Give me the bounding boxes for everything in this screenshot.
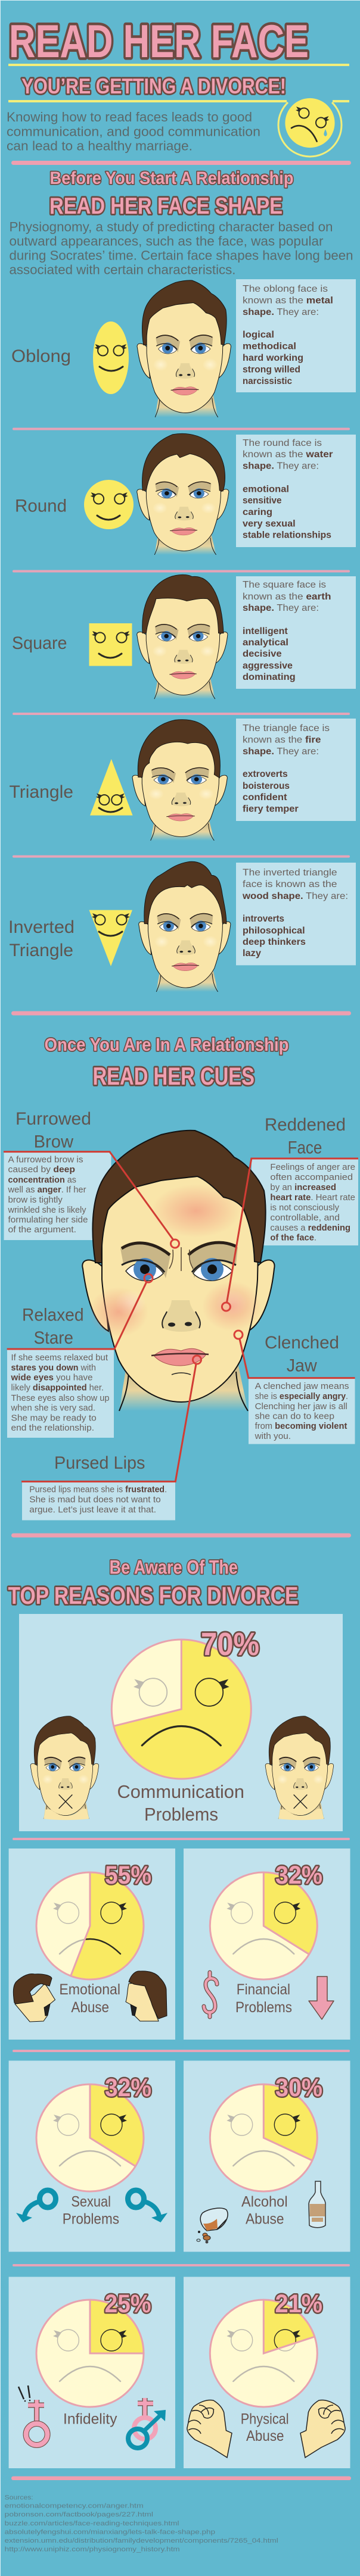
text: oblong traits: logical xyxy=(243,330,274,340)
panel: reddened face text: is not consciously xyxy=(270,1203,340,1213)
pie chart: 55% xyxy=(36,1872,144,1979)
pie chart: 32% xyxy=(36,2084,144,2191)
icon: round smiley xyxy=(84,480,134,529)
text: inverted triangle traits: The inverted triangle xyxy=(243,868,337,878)
label: alcohol abuse: Abuse xyxy=(246,2211,284,2228)
panel: reddened face text: of the face. xyxy=(270,1234,316,1243)
text: triangle traits: shape. They are: xyxy=(243,747,319,757)
label: reddened face: Reddened xyxy=(265,1115,346,1135)
text: oblong traits: The oblong face is xyxy=(243,284,328,294)
label: emotional abuse: Abuse xyxy=(71,1999,109,2016)
text: round traits xyxy=(236,435,356,547)
panel: clenched jaw text: from becoming violent xyxy=(255,1422,347,1431)
callout line: relaxed stare xyxy=(7,1274,153,1349)
pie chart: 30% xyxy=(210,2084,317,2191)
text: round traits: stable relationships xyxy=(243,530,331,541)
panel: relaxed stare text: end the relationship. xyxy=(11,1423,94,1433)
physiognomy text: outward appearances, such as the face, was popular xyxy=(10,233,323,249)
sources: http://www.uniphiz.com/physiognomy_history.htm xyxy=(5,2546,180,2553)
text: inverted triangle traits xyxy=(236,863,356,965)
panel: pursed lips text: Pursed lips means she is frustrated. xyxy=(29,1485,167,1494)
panel: relaxed stare text: She may be ready to xyxy=(11,1413,97,1423)
panel: clenched jaw text: with you. xyxy=(255,1432,291,1441)
text: round traits: sensitive xyxy=(243,496,282,506)
text: triangle traits: extroverts xyxy=(243,769,288,779)
label: emotional abuse: Emotional xyxy=(59,1981,120,1998)
label: clenched jaw xyxy=(265,1333,339,1376)
face: angry woman xyxy=(82,1131,275,1411)
icon: fist right xyxy=(300,2400,345,2458)
text: inverted triangle traits: philosophical xyxy=(243,926,305,936)
panel: clenched jaw text xyxy=(249,1378,355,1444)
intro text: communication, and good communication xyxy=(7,124,260,139)
label: furrowed brow: Brow xyxy=(34,1132,73,1151)
panel: furrowed brow text: formulating her side xyxy=(8,1216,88,1225)
panel: clenched jaw text: Clenching her jaw is all xyxy=(255,1402,347,1412)
heading: read her cues: READ HER CUES xyxy=(93,1062,255,1090)
panel: pursed lips text: argue. Let’s just leave it at that. xyxy=(29,1505,156,1515)
heading: be aware of the: Be Aware Of The xyxy=(110,1557,238,1578)
stat: 32%: 32% xyxy=(105,2074,151,2102)
sources: absolutelyfengshui.com/mianxiang/lets-talk-face-shape.php xyxy=(5,2529,215,2536)
intro text: can lead to a healthy marriage. xyxy=(7,138,193,154)
text: oblong traits: known as the metal xyxy=(243,295,333,306)
text: oblong traits: narcissistic xyxy=(243,376,292,386)
text: square traits: The square face is xyxy=(243,580,326,590)
heading: top reasons for divorce: TOP REASONS FOR DIVORCE xyxy=(8,1582,298,1609)
label: reddened face xyxy=(265,1115,346,1157)
icon: oblong smiley xyxy=(93,321,129,394)
text: oblong traits: shape. They are: xyxy=(243,307,319,317)
panel: reddened face text: Feelings of anger are xyxy=(270,1163,355,1172)
heading: read her face shape: READ HER FACE SHAPE xyxy=(49,193,283,219)
label: square: Square xyxy=(12,633,67,653)
label: physical abuse: Abuse xyxy=(246,2428,284,2444)
label: clenched jaw: Jaw xyxy=(287,1356,317,1376)
text: square traits: known as the earth xyxy=(243,592,331,602)
label: inverted triangle xyxy=(8,917,75,960)
label: financial problems: Problems xyxy=(235,1999,292,2016)
panel: alcohol abuse xyxy=(184,2060,350,2252)
face: round xyxy=(137,433,229,555)
panel: furrowed brow text: concentration as xyxy=(8,1175,76,1185)
panel: square xyxy=(12,574,356,699)
text: square traits: shape. They are: xyxy=(243,603,319,613)
label: emotional abuse xyxy=(59,1981,120,2016)
icon: male symbol left xyxy=(16,2190,56,2222)
panel: furrowed brow text: wrinkled she is likely xyxy=(8,1206,86,1215)
panel: reddened face text: by an increased xyxy=(270,1183,336,1192)
icon: shouting man xyxy=(13,1974,55,2022)
text: oblong traits: hard working xyxy=(243,353,303,363)
pie chart: 32% xyxy=(210,1872,317,1979)
face: triangle xyxy=(132,720,227,841)
text: triangle traits: boisterous xyxy=(243,781,290,791)
text: round traits: The round face is xyxy=(243,438,322,448)
stat: 70%: 70% xyxy=(201,1626,259,1662)
text: triangle traits: The triangle face is xyxy=(243,723,330,733)
panel: furrowed brow text: brow is tightly xyxy=(8,1195,63,1205)
text: inverted triangle traits: introverts xyxy=(243,914,284,924)
panel: furrowed brow text: caused by deep xyxy=(8,1165,75,1175)
text: oblong traits xyxy=(236,279,356,392)
icon: female and male symbols xyxy=(128,2398,166,2448)
face: gagged left xyxy=(30,1716,99,1820)
panel: reddened face text: heart rate. Heart rate xyxy=(270,1193,355,1203)
physiognomy text: Physiognomy, a study of predicting character based on xyxy=(10,219,333,235)
heading: before you start a relationship: Before You Start A Relationship xyxy=(50,168,293,188)
label: inverted triangle: Triangle xyxy=(10,941,73,960)
panel: communication problems xyxy=(19,1614,343,1831)
icon: fist left xyxy=(187,2400,232,2458)
stat: 55%: 55% xyxy=(105,1861,151,1890)
face: inverted triangle xyxy=(139,861,231,992)
physiognomy text xyxy=(10,219,353,277)
panel: relaxed stare text: likely disappointed her. xyxy=(11,1384,104,1393)
pie chart: 70% xyxy=(111,1640,251,1779)
label: furrowed brow: Furrowed xyxy=(15,1109,91,1129)
label: physical abuse: Physical xyxy=(241,2411,289,2428)
panel: reddened face text: often accompanied xyxy=(270,1173,353,1182)
text: square traits: decisive xyxy=(243,649,282,659)
text: triangle traits: known as the fire xyxy=(243,735,321,745)
label: relaxed stare: Relaxed xyxy=(22,1306,84,1325)
label: financial problems xyxy=(235,1981,292,2016)
pie chart: 25% xyxy=(36,2300,144,2407)
sources xyxy=(5,2494,278,2553)
panel: furrowed brow text xyxy=(4,1152,111,1240)
intro text: Knowing how to read faces leads to good xyxy=(7,110,252,124)
text: inverted triangle traits: lazy xyxy=(243,948,261,958)
panel: sexual problems xyxy=(9,2060,175,2252)
panel: reddened face text xyxy=(252,1159,358,1245)
text: square traits: aggressive xyxy=(243,661,293,671)
text: inverted triangle traits: face is known as the xyxy=(243,879,337,889)
icon: dollar sign xyxy=(204,1972,217,2017)
sources: pobronson.com/factbook/pages/227.html xyxy=(5,2511,153,2518)
label: communication problems xyxy=(117,1781,244,1825)
text: round traits: shape. They are: xyxy=(243,461,319,472)
label: communication problems: Problems xyxy=(144,1804,218,1825)
panel: pursed lips text: She is mad but does not want to xyxy=(29,1495,161,1505)
panel: relaxed stare text: when she is very sad. xyxy=(10,1404,95,1413)
label: triangle: Triangle xyxy=(10,782,73,802)
label: alcohol abuse xyxy=(241,2194,288,2228)
panel: relaxed stare text: These eyes also show up xyxy=(11,1394,110,1403)
label: pursed lips: Pursed Lips xyxy=(54,1453,145,1473)
panel: furrowed brow text: of the argument. xyxy=(8,1225,76,1235)
label: sexual problems: Sexual xyxy=(71,2194,111,2210)
panel: oblong xyxy=(11,279,356,417)
text: round traits: known as the water xyxy=(243,449,333,460)
text: round traits: emotional xyxy=(243,485,289,494)
label: round: Round xyxy=(15,497,67,516)
heading: once you are in a relationship: Once You Are In A Relationship xyxy=(44,1034,288,1055)
text: round traits: caring xyxy=(243,507,272,517)
text: triangle traits xyxy=(236,719,356,821)
text: square traits: intelligent xyxy=(243,626,288,636)
sources: buzzle.com/articles/face-reading-techniques.html xyxy=(5,2520,179,2527)
physiognomy text: during Socrates’ time. Certain face shapes have long been xyxy=(10,248,353,263)
callout line: furrowed brow xyxy=(4,1152,179,1248)
panel: relaxed stare text xyxy=(7,1349,114,1438)
text: triangle traits: confident xyxy=(243,792,287,803)
callout line: clenched jaw xyxy=(234,1331,355,1378)
panel: relaxed stare text: wide eyes you have xyxy=(10,1373,93,1383)
icon: triangle smiley xyxy=(90,759,133,816)
panel: infidelity xyxy=(9,2277,175,2468)
icon: down arrow xyxy=(309,1977,334,2019)
label: oblong: Oblong xyxy=(11,346,71,366)
label: sexual problems: Problems xyxy=(63,2211,119,2228)
text: square traits: dominating xyxy=(243,672,296,682)
label: furrowed brow xyxy=(15,1109,91,1151)
sources: extension.umn.edu/distribution/familydevelopment/components/7265_04.html xyxy=(5,2537,278,2544)
label: alcohol abuse: Alcohol xyxy=(241,2194,288,2210)
panel: inverted triangle xyxy=(8,861,356,992)
callout line: reddened face xyxy=(222,1159,358,1311)
label: relaxed stare xyxy=(22,1306,84,1348)
panel: round xyxy=(15,433,356,555)
face: oblong xyxy=(137,280,231,417)
text: oblong traits: methodical xyxy=(243,342,296,351)
label: reddened face: Face xyxy=(288,1138,322,1157)
text: oblong traits: strong willed xyxy=(243,364,300,375)
panel: emotional abuse xyxy=(9,1849,175,2040)
stat: 25%: 25% xyxy=(105,2290,151,2318)
panel: relaxed stare text: If she seems relaxed but xyxy=(11,1353,108,1363)
physiognomy text: associated with certain characteristics. xyxy=(10,262,236,277)
text: round traits: very sexual xyxy=(243,519,296,529)
label: relaxed stare: Stare xyxy=(34,1328,73,1348)
label: clenched jaw: Clenched xyxy=(265,1333,339,1353)
face: square xyxy=(137,574,228,699)
stat: 32%: 32% xyxy=(275,1861,322,1890)
icon: crying face xyxy=(278,98,342,157)
panel: reddened face text: controllable, and xyxy=(270,1213,340,1223)
icon: inverted triangle smiley xyxy=(89,910,132,966)
panel: clenched jaw text: she is especially angry. xyxy=(255,1392,348,1401)
label: physical abuse xyxy=(241,2411,289,2444)
text: inverted triangle traits: wood shape. They are: xyxy=(242,891,348,901)
icon: square smiley xyxy=(89,623,132,666)
panel: reddened face text: causes a reddening xyxy=(270,1223,350,1233)
panel: furrowed brow text: A furrowed brow is xyxy=(8,1155,83,1164)
sources: Sources: xyxy=(5,2494,33,2502)
icon: bottle xyxy=(309,2181,325,2228)
panel: clenched jaw text: A clenched jaw means xyxy=(255,1382,349,1391)
panel: clenched jaw text: she can do to keep xyxy=(255,1412,334,1422)
panel: financial problems xyxy=(184,1849,350,2040)
stat: 30%: 30% xyxy=(275,2074,322,2102)
sources: emotionalcompetency.com/anger.htm xyxy=(5,2503,144,2510)
intro text xyxy=(7,110,260,154)
label: inverted triangle: Inverted xyxy=(8,917,75,937)
text: inverted triangle traits: deep thinkers xyxy=(243,937,306,947)
callout line: pursed lips xyxy=(21,1356,201,1482)
label: infidelity: Infidelity xyxy=(63,2411,117,2428)
panel: relaxed stare text: stares you down with xyxy=(11,1363,96,1373)
pie chart: 21% xyxy=(210,2300,317,2407)
text: square traits: analytical xyxy=(243,638,288,648)
panel: furrowed brow text: well as anger. If her xyxy=(7,1185,86,1195)
panel: physical abuse xyxy=(184,2277,350,2468)
label: financial problems: Financial xyxy=(237,1981,290,1998)
text: square traits xyxy=(236,576,356,689)
face: gagged right xyxy=(265,1716,334,1820)
panel: triangle xyxy=(10,719,356,841)
icon: male symbol right xyxy=(128,2190,167,2222)
panel: pursed lips text xyxy=(22,1482,175,1520)
subtitle: YOU’RE GETTING A DIVORCE! xyxy=(21,74,286,98)
icon: female symbol with exclamation xyxy=(18,2385,48,2445)
label: communication problems: Communication xyxy=(117,1781,244,1802)
icon: shouting woman xyxy=(126,1971,167,2021)
icon: spilled glass xyxy=(197,2208,228,2243)
text: triangle traits: fiery temper xyxy=(243,804,299,814)
label: sexual problems xyxy=(63,2194,119,2228)
stat: 21%: 21% xyxy=(275,2290,322,2318)
